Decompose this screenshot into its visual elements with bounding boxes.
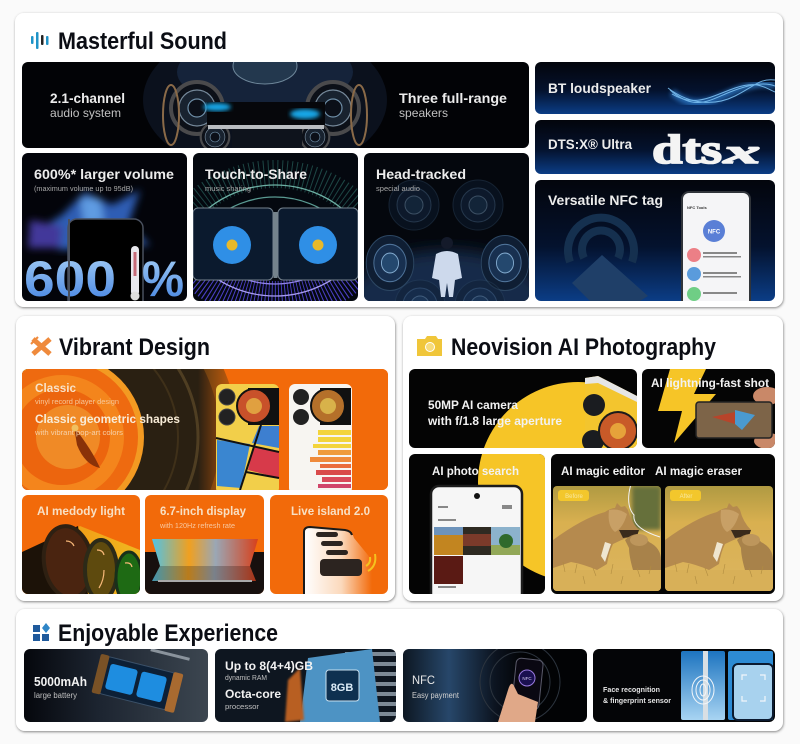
label: Head-tracked: special audio xyxy=(376,186,420,193)
card: 600% larger volume: % xyxy=(142,251,184,307)
card: 5000mAh battery xyxy=(24,648,208,722)
card: AI magic editor and eraser: AI magic editor xyxy=(561,464,645,478)
label: Three full-range speakers: speakers xyxy=(399,106,448,120)
heading: Vibrant Design: Vibrant Design xyxy=(59,334,210,361)
label: BT loudspeaker: BT loudspeaker xyxy=(548,80,652,96)
card: NFC easy payment xyxy=(403,642,587,722)
photo: lions before xyxy=(553,484,661,591)
label: Classic vinyl record player design: Classic xyxy=(35,381,76,395)
label: Touch-to-Share: music sharing xyxy=(205,186,251,193)
card: RAM and Octa-core: dynamic RAM xyxy=(225,673,267,682)
card: 600% larger volume: 600 xyxy=(24,251,116,307)
label: Head-tracked xyxy=(376,166,466,193)
card: NFC easy payment: Easy payment xyxy=(412,691,460,700)
card: DTS:X Ultra xyxy=(535,120,775,174)
card: 5000mAh battery: large battery xyxy=(34,691,77,700)
card: 6.7-inch display xyxy=(145,495,264,594)
card: BT loudspeaker xyxy=(535,62,775,114)
card: Face recognition and fingerprint: Face recognition xyxy=(603,685,660,694)
panel: Vibrant Design xyxy=(14,315,398,604)
panel: Masterful Sound xyxy=(14,12,786,310)
label: 6.7-inch display with 120Hz refresh rate xyxy=(159,504,246,530)
card: NFC easy payment: NFC xyxy=(412,673,435,687)
card: vinyl classic design xyxy=(22,369,388,490)
label: 50MP AI camera with f/1.8 large aperture: 50MP AI camera xyxy=(428,398,518,412)
card: AI magic editor and eraser xyxy=(551,454,775,594)
icon: sound bars xyxy=(31,32,48,49)
logo: dts x: dts xyxy=(652,126,722,172)
photo: lions after: After xyxy=(680,494,692,500)
heading: Enjoyable Experience: Enjoyable Experience xyxy=(58,620,278,647)
label: 2.1-channel audio system xyxy=(50,90,125,120)
icon: app grid xyxy=(33,623,50,641)
label: Classic vinyl record player design: vinyl record player design xyxy=(35,399,119,406)
label: Classic vinyl record player design xyxy=(35,381,119,406)
label: AI melody light: AI medody light xyxy=(37,504,125,518)
label: 2.1-channel audio system: audio system xyxy=(50,106,121,120)
label: 600% larger volume: (maximum volume up to 95dB) xyxy=(34,186,133,193)
label: Classic geometric shapes: with vibrant pop-art colors xyxy=(34,430,124,437)
heading: Masterful Sound: Masterful Sound xyxy=(58,28,227,55)
label: AI lightning-fast shot: AI lightning-fast shot xyxy=(651,376,769,390)
label: 600% larger volume xyxy=(34,166,174,193)
card: RAM and Octa-core: Up to 8(4+4)GB xyxy=(225,659,313,673)
card: RAM and Octa-core: Octa-core xyxy=(225,687,281,701)
label: Three full-range speakers: Three full-range xyxy=(399,90,507,106)
card: Face recognition and fingerprint: & fingerprint sensor xyxy=(603,696,671,705)
icon: crossed tools xyxy=(31,337,50,354)
label: Classic geometric shapes: Classic geometric shapes xyxy=(35,412,180,426)
card: NFC easy payment: NFC xyxy=(522,676,532,681)
phone: yellow pop-art xyxy=(216,384,279,494)
label: 50MP AI camera with f/1.8 large aperture xyxy=(427,398,562,428)
photo: lions before: Before xyxy=(565,494,583,500)
card: 600% larger volume xyxy=(22,153,187,309)
card: Live island 2.0 xyxy=(270,495,388,595)
logo: dts x xyxy=(652,126,760,172)
label: 6.7-inch display with 120Hz refresh rate: 6.7-inch display xyxy=(160,504,246,518)
heading: Neovision AI Photography: Neovision AI Photography xyxy=(451,334,717,361)
card: Versatile NFC tag xyxy=(535,180,775,312)
card: DTS:X Ultra: DTS:X® Ultra xyxy=(548,136,632,152)
label: Versatile NFC tag: Versatile NFC tag xyxy=(548,192,663,208)
label: Touch-to-Share: Touch-to-Share xyxy=(205,166,307,182)
card: 2.1-channel speakers xyxy=(22,62,529,148)
label: 600% larger volume: 600%* larger volume xyxy=(34,166,174,182)
label: 2.1-channel audio system: 2.1-channel xyxy=(50,90,125,106)
label: Three full-range speakers xyxy=(399,90,507,120)
label: 6.7-inch display with 120Hz refresh rate: with 120Hz refresh rate xyxy=(159,523,235,530)
card: AI photo search xyxy=(409,454,545,594)
card: AI lightning-fast shot xyxy=(642,369,782,449)
label: 50MP AI camera with f/1.8 large aperture: with f/1.8 large aperture xyxy=(427,414,562,428)
label: Live island 2.0: Live island 2.0 xyxy=(291,504,370,518)
label: Classic geometric shapes xyxy=(34,412,180,437)
card: Versatile NFC tag: NFC xyxy=(708,230,721,236)
card: Head-tracked xyxy=(364,153,529,301)
card: Face recognition and fingerprint xyxy=(593,649,775,722)
card: AI magic editor and eraser: AI magic eraser xyxy=(655,464,742,478)
card: 5000mAh battery: 5000mAh xyxy=(34,674,87,689)
card: AI melody light xyxy=(22,495,140,594)
photo: lions after xyxy=(665,486,773,591)
panel: Neovision AI Photography xyxy=(403,316,783,606)
icon: camera xyxy=(417,336,442,356)
panel: Enjoyable Experience xyxy=(16,609,783,731)
card: RAM and Octa-core: 8GB xyxy=(331,682,353,694)
card: 50MP AI camera xyxy=(409,369,637,448)
card: Versatile NFC tag: NFC Tools xyxy=(687,205,707,210)
card: Touch-to-Share xyxy=(193,153,358,301)
phone: white stripes xyxy=(289,384,352,494)
label: AI photo search: AI photo search xyxy=(432,464,519,478)
card: RAM and Octa-core: processor xyxy=(225,702,260,711)
label: Head-tracked: Head-tracked xyxy=(376,166,466,182)
card: RAM and Octa-core xyxy=(215,649,396,722)
logo: dts x: x xyxy=(722,134,760,171)
label: Touch-to-Share xyxy=(205,166,307,193)
